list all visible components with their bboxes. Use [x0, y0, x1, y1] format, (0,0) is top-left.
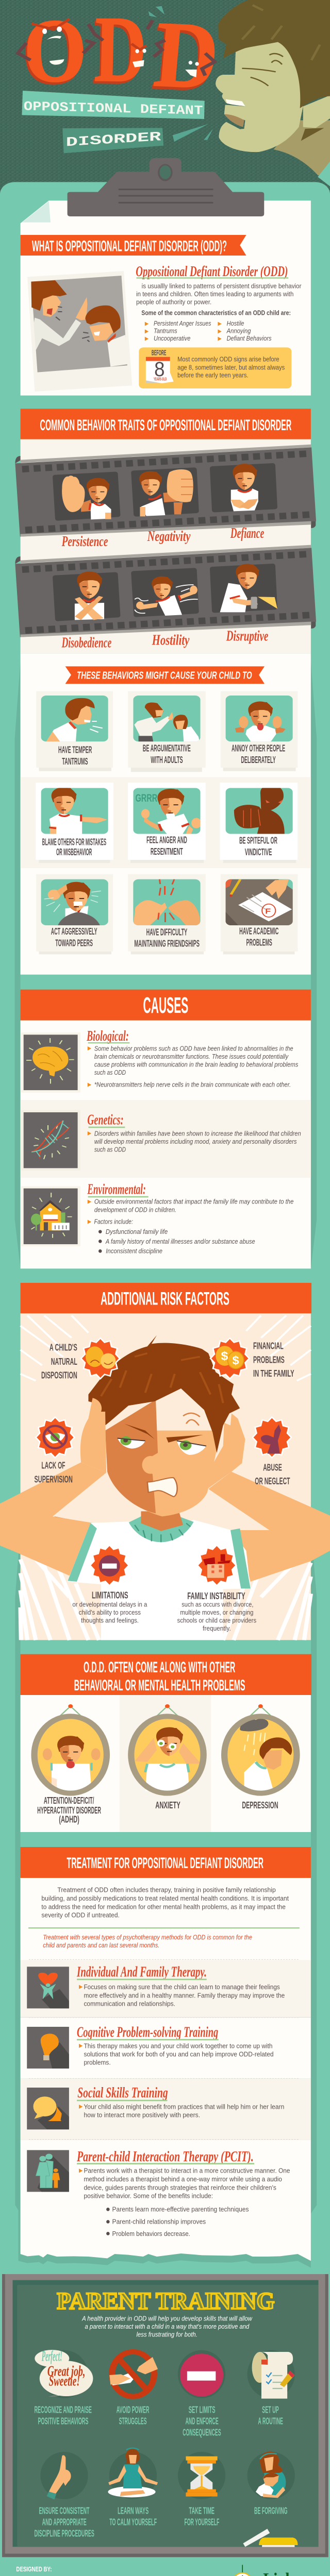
text block: parent training intro: A health provider in ODD will help you develop skills that will allow — [81, 2315, 253, 2323]
badge: family instability — [177, 1545, 256, 1633]
text: CONSEQUENCES — [183, 2428, 221, 2438]
band row 2 — [21, 777, 311, 868]
icon: DNA — [21, 1110, 80, 1171]
text: BLAME OTHERS FOR MISTAKES — [42, 837, 106, 848]
heading: what is ODD — [21, 235, 246, 256]
badge: family instability: schools or child care providers — [177, 1617, 256, 1624]
text block: parent training intro: less frustrating for both. — [136, 2331, 197, 2338]
chalk and eraser — [243, 2529, 298, 2547]
text: ENSURE CONSISTENT — [39, 2505, 90, 2516]
card: blame others: OR MISBEHAVIOR — [56, 847, 92, 857]
section: environmental: Factors include: — [94, 1218, 133, 1226]
section: biological: Biological: — [87, 1028, 129, 1044]
panel: therapy background lower — [19, 2018, 311, 2268]
card: be argumentative: WITH ADULTS — [151, 755, 183, 765]
title: ODD letters: O — [24, 1, 87, 101]
card: be argumentative — [128, 691, 206, 772]
list: characteristics: Tantrums — [154, 328, 177, 335]
callout: before age 8: Most commonly ODD signs arise before — [177, 356, 279, 363]
text: FOR YOURSELF — [185, 2517, 219, 2528]
labels: comorbid conditions — [37, 1795, 278, 1825]
text: RECOGNIZE AND PRAISE — [35, 2404, 92, 2415]
badge: limitations: thoughts and feelings. — [81, 1617, 139, 1624]
label: disobedience / hostility / disruptive: Hostility — [152, 632, 189, 648]
section: social skills: how to interact more positively with peers. — [84, 2112, 200, 2119]
section: environmental: Inconsistent discipline — [106, 1248, 162, 1255]
card: temper tantrums — [36, 691, 113, 771]
text: AVOID POWER — [117, 2404, 149, 2415]
icon: calendar — [146, 357, 174, 383]
card: be argumentative: BE ARGUMENTATIVE — [143, 743, 191, 754]
banner: oppositional defiant: OPPOSITIONAL DEFIANT — [24, 99, 203, 118]
badge: lack of supervision: SUPERVISION — [35, 1475, 73, 1485]
section: individual and family therapy — [27, 1964, 285, 2008]
paper background: causes — [21, 1021, 311, 1268]
tip: take time: TAKE TIME — [189, 2505, 214, 2516]
text: OR NEGLECT — [255, 1476, 290, 1486]
badge: limitations — [72, 1545, 147, 1624]
panel: behavior traits backgrounds — [21, 439, 311, 975]
shout marks — [148, 6, 213, 142]
text block: treatment intro: severity of ODD if untreated. — [41, 1912, 120, 1919]
labels: comorbid conditions: (ADHD) — [59, 1815, 79, 1825]
section: PCIT: positive behavior. Some of the benefits include: — [84, 2193, 213, 2200]
card: friendships — [128, 874, 206, 954]
section: cognitive training: problems. — [84, 2059, 111, 2066]
text: TO CALM YOURSELF — [109, 2517, 157, 2528]
panel: comorbid background — [21, 1695, 311, 1832]
section: biological: such as ODD — [94, 1069, 126, 1077]
icon: speech bubbles — [48, 2107, 62, 2121]
paper shadow strip lower — [15, 1529, 317, 2214]
heading: causes: CAUSES — [143, 993, 188, 1018]
heading: additional risk factors — [21, 1283, 311, 1313]
card: annoy other people — [221, 691, 298, 771]
clipboard clip — [68, 158, 264, 216]
heading: comorbid problems — [21, 1654, 311, 1695]
portrait: depression — [224, 1704, 297, 1793]
card: feel anger: FEEL ANGER AND — [146, 835, 187, 845]
tip: recognize and praise: Perfect! — [41, 2348, 62, 2364]
badge: natural disposition — [41, 1338, 120, 1381]
text block: parent training intro: a parent to interact with a child in a way that's more positive and — [85, 2323, 250, 2331]
portrait: anxiety — [131, 1704, 204, 1793]
heading: causes — [21, 990, 311, 1021]
badge: limitations: child's ability to process — [79, 1609, 141, 1617]
card: spiteful — [220, 783, 298, 863]
section: biological — [21, 1028, 299, 1093]
badge: abuse or neglect — [253, 1417, 291, 1486]
section: PCIT: Parent-child relationship improves — [112, 2218, 206, 2226]
film strip 2 — [15, 545, 316, 637]
labels: comorbid conditions: HYPERACTIVITY DISORDER — [37, 1805, 101, 1816]
badge: natural disposition: DISPOSITION — [41, 1370, 77, 1381]
card: feel anger: RESENTMENT — [151, 846, 183, 857]
card: academic problems: F — [265, 907, 271, 916]
title: ODD letters: D — [93, 0, 147, 102]
paper panel: what is ODD — [21, 200, 311, 396]
card: act aggressively: ACT AGGRESSIVELY — [51, 926, 97, 937]
tip: take time — [178, 2452, 225, 2528]
badge: abuse or neglect: ABUSE — [263, 1462, 282, 1473]
text block: parent training intro — [81, 2315, 253, 2338]
paper shadow strip upper — [15, 661, 317, 1268]
list: characteristics: Defiant Behaviors — [227, 335, 272, 343]
icon: house — [21, 1186, 80, 1246]
card: annoy other people: DELIBERATELY — [241, 755, 276, 765]
tip: set up a routine: A ROUTINE — [258, 2416, 283, 2427]
clipboard — [0, 182, 330, 396]
list: characteristics: Persistent Anger Issues — [154, 320, 211, 328]
card: friendships: HAVE DIFFICULTY — [146, 927, 187, 938]
list: characteristics: Annoying — [226, 328, 251, 335]
text: MAINTAINING FRIENDSHIPS — [134, 939, 200, 949]
badge: financial problems: FINANCIAL — [253, 1341, 284, 1351]
section: individual and family therapy: Individual And Family Therapy. — [76, 1964, 207, 1980]
callout: before age 8 — [139, 347, 291, 388]
text: AND ENFORCE — [186, 2416, 219, 2427]
icon: brain — [21, 1032, 80, 1093]
icon: family — [39, 2156, 46, 2161]
tip: recognize and praise: Sweetie! — [49, 2373, 80, 2389]
badge: family instability: such as occurs with divorce, — [182, 1601, 253, 1608]
badge: family instability: frequently. — [203, 1625, 231, 1633]
frame: hostility — [135, 577, 198, 616]
film strip 1 — [15, 445, 316, 537]
labels: comorbid conditions: ANXIETY — [155, 1800, 180, 1810]
panel: treatment backgrounds — [21, 1878, 311, 2018]
callout: before age 8: before the early teen years. — [177, 372, 249, 379]
card: act aggressively — [36, 874, 113, 954]
portrait: ADHD — [35, 1704, 107, 1793]
list: characteristics: Uncooperative — [154, 335, 190, 343]
section: social skills — [27, 2084, 284, 2129]
text block: treatment intro: child and parents and can last several months. — [43, 1942, 159, 1950]
arms — [18, 20, 214, 76]
icon: heart and person — [38, 1973, 58, 1987]
section: genetics: Genetics: — [87, 1112, 124, 1128]
heading: treatment — [21, 1847, 311, 1878]
illustration: parent scolding child photo — [27, 271, 132, 392]
tip: recognize and praise: Great job, — [47, 2363, 85, 2379]
tip: set up a routine: SET UP — [262, 2404, 279, 2415]
title: ODD letters: D — [151, 2, 223, 109]
frame: negativity — [139, 469, 193, 516]
card: temper tantrums: TANTRUMS — [62, 756, 88, 767]
card: feel anger: GRRR — [135, 792, 157, 804]
label: disobedience / hostility / disruptive: Disobedience — [61, 635, 111, 651]
faces — [31, 19, 146, 50]
chalkboard panel — [2, 2274, 328, 2557]
tip: avoid power struggles: STRUGGLES — [119, 2416, 147, 2427]
heading: common behavior traits — [21, 409, 311, 439]
text block: treatment intro — [28, 1887, 300, 1959]
hero board background — [0, 0, 330, 202]
label: persistence / negativity / defiance — [61, 525, 264, 549]
banner: disorder — [62, 128, 163, 153]
card: act aggressively: TOWARD PEERS — [55, 938, 93, 948]
card: academic problems — [221, 874, 298, 954]
badge: lack of supervision: LACK OF — [41, 1461, 65, 1471]
panel: risk factors background — [21, 1313, 311, 1640]
icon: light bulb — [41, 2033, 59, 2055]
callout: before age 8: age 8, sometimes later, but almost always — [177, 364, 285, 371]
section: genetics — [21, 1110, 301, 1171]
section: PCIT: Parents learn more-effective parenting techniques — [112, 2206, 249, 2213]
tip: calm yourself: LEARN WAYS — [118, 2505, 148, 2516]
frame: disruptive — [220, 564, 277, 612]
icon: calendar: YEARS OLD — [154, 377, 167, 381]
section: environmental: A family history of mental illnesses and/or substance abuse — [105, 1238, 255, 1246]
tip: be forgiving — [248, 2451, 295, 2516]
title: ODD letters: O — [22, 3, 85, 104]
illustration: boy covering ears — [0, 1335, 330, 1590]
ribbon heading: these behaviors — [65, 666, 265, 684]
badge: financial problems — [210, 1338, 294, 1379]
banner: disorder: DISORDER — [66, 129, 161, 150]
badge: limitations: LIMITATIONS — [92, 1590, 128, 1601]
title: ODD letters: D — [92, 0, 146, 104]
text: POSITIVE BEHAVIORS — [38, 2416, 88, 2427]
text: AND APPROPRIATE — [42, 2517, 87, 2528]
card: academic problems: PROBLEMS — [246, 938, 272, 948]
callout: before age 8: BEFORE — [152, 349, 166, 357]
card: feel anger — [128, 783, 206, 863]
badge: natural disposition: NATURAL — [51, 1357, 77, 1367]
badge: limitations: or developmental delays in a — [72, 1601, 147, 1608]
text block: definition — [136, 263, 302, 317]
illustration: shouting boy — [216, 0, 330, 187]
badge: financial problems: $ — [221, 1349, 228, 1363]
section: PCIT: Problem behaviors decrease. — [112, 2230, 190, 2238]
badge: financial problems: PROBLEMS — [253, 1354, 285, 1365]
title: ODD letters: D — [149, 5, 221, 112]
badge: natural disposition: A CHILD'S — [50, 1343, 77, 1353]
section: environmental: Dysfunctional family life — [106, 1228, 168, 1236]
tip: set up a routine — [248, 2350, 295, 2427]
section: individual and family therapy: communication and relationships. — [84, 2001, 175, 2008]
heading: parent training: PARENT TRAINING — [57, 2288, 275, 2314]
text: DISCIPLINE PROCEDURES — [35, 2529, 94, 2539]
credit: designed by Voxxy: DESIGNED BY: — [16, 2565, 52, 2573]
tip: ensure consistent discipline — [35, 2452, 94, 2539]
title: ODD letters — [18, 0, 223, 112]
label: persistence / negativity / defiance: Negativity — [147, 528, 190, 544]
tip: set limits — [178, 2350, 225, 2438]
frame: persistence — [62, 476, 111, 519]
label: persistence / negativity / defiance: Persistence — [61, 533, 108, 549]
badge: financial problems: $ — [233, 1353, 239, 1367]
logo: Liahona Academy — [228, 2565, 322, 2576]
label: disobedience / hostility / disruptive — [61, 628, 268, 651]
frame: disobedience — [75, 571, 104, 620]
section: PCIT — [27, 2148, 290, 2238]
card: temper tantrums: HAVE TEMPER — [58, 745, 92, 755]
text block: definition: people of authority or power. — [136, 299, 211, 306]
section: environmental — [21, 1181, 293, 1255]
section: genetics: such as ODD — [94, 1146, 126, 1154]
banner: oppositional defiant — [22, 91, 205, 119]
section: social skills: Social Skills Training — [77, 2084, 168, 2100]
tip: recognize and praise — [35, 2348, 93, 2427]
tip: calm yourself — [108, 2448, 158, 2528]
tip: set limits: SET LIMITS — [189, 2404, 216, 2415]
list: characteristics: Hostile — [227, 320, 244, 328]
badge: lack of supervision — [35, 1417, 74, 1485]
label: disobedience / hostility / disruptive: Disruptive — [226, 628, 268, 644]
label: persistence / negativity / defiance: Defiance — [230, 525, 264, 541]
tip: avoid power struggles — [109, 2352, 158, 2427]
list: characteristics — [145, 320, 272, 343]
labels: comorbid conditions: ATTENTION-DEFICIT/ — [44, 1795, 94, 1806]
icon: calendar: 8 — [154, 358, 165, 381]
badge: family instability: multiple moves, or changing — [180, 1609, 253, 1617]
text: DEPRESSION — [242, 1800, 278, 1810]
section: environmental: development of ODD in children. — [94, 1207, 176, 1214]
badge: family instability: FAMILY INSTABILITY — [187, 1591, 245, 1601]
card: spiteful: VINDICTIVE — [245, 847, 272, 857]
section: cognitive training — [27, 2024, 274, 2069]
card: blame others — [36, 783, 113, 863]
frame: defiance — [231, 464, 258, 511]
section: environmental: Environmental: — [87, 1181, 146, 1197]
